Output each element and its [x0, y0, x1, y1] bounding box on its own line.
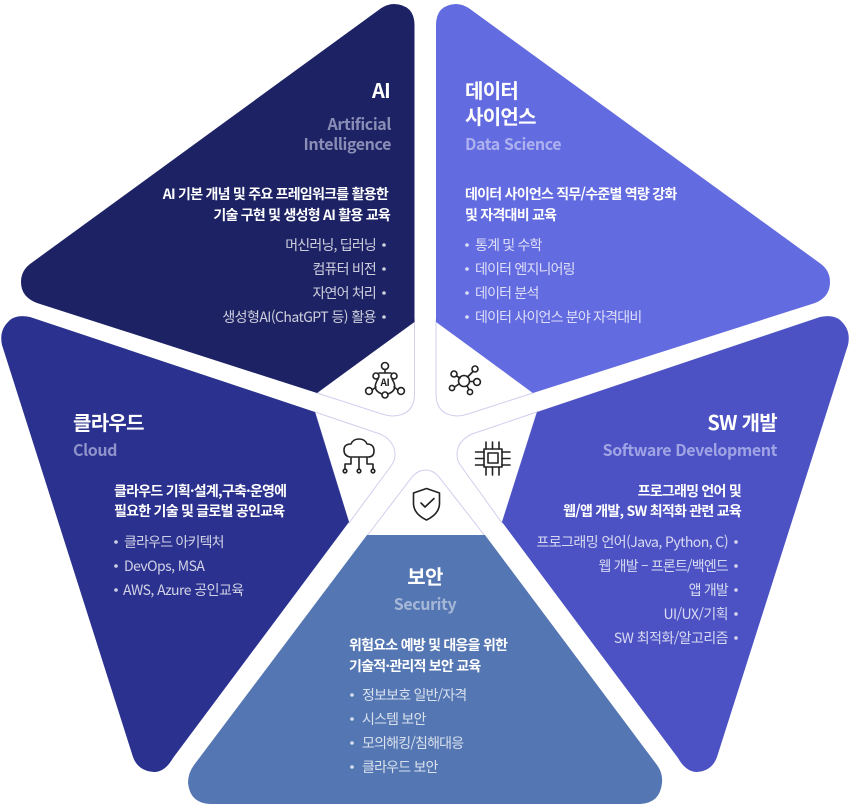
subtitle: Data Science: Data Science: [465, 131, 561, 155]
subtitle: Artificial Intelligence: Artificial: [328, 111, 391, 135]
description: Cloud: 필요한 기술 및 글로벌 공인교육: [114, 501, 285, 521]
panel: Data Science: [436, 4, 830, 416]
description: AI: AI 기본 개념 및 주요 프레임워크를 활용한: [163, 184, 388, 204]
description: SW Development: 프로그래밍 언어 및: [638, 481, 741, 501]
icon: AI network: [366, 362, 404, 398]
list: Data Science topics: 통계 및 수학: [475, 235, 543, 255]
heading: Cloud: 클라우드: [73, 407, 144, 436]
description: SW Development: 웹/앱 개발, SW 최적화 관련 교육: [563, 501, 742, 521]
list: Security topics: 정보보호 일반/자격: [362, 685, 466, 705]
icon: data network: [449, 366, 480, 395]
list: AI topics: 자연어 처리: [312, 283, 376, 303]
icon: chip: [476, 442, 510, 475]
description: Security: 위험요소 예방 및 대응을 위한: [349, 635, 507, 655]
list: Security topics: 모의해킹/침해대응: [362, 733, 464, 753]
description: Security: 기술적·관리적 보안 교육: [349, 656, 481, 676]
subtitle: Security: Security: [394, 591, 456, 615]
subtitle: Cloud: Cloud: [73, 437, 117, 461]
list: Data Science topics: 데이터 사이언스 분야 자격대비: [475, 307, 641, 327]
description: Cloud: 클라우드 기획·설계,구축·운영에: [114, 481, 286, 501]
list: Security topics: 클라우드 보안: [362, 757, 439, 777]
icon: shield: [414, 488, 440, 520]
list: Cloud topics: AWS, Azure 공인교육: [123, 580, 244, 600]
list: AI topics: 머신러닝, 딥러닝: [285, 235, 376, 255]
list: Data Science topics: 데이터 분석: [475, 283, 539, 303]
list: Cloud topics: [114, 532, 244, 600]
panel: Security: [188, 470, 662, 804]
list: Data Science topics: 데이터 엔지니어링: [475, 259, 575, 279]
list: Data Science topics: [465, 235, 641, 327]
list: SW topics: UI/UX/기획: [663, 604, 728, 624]
list: AI topics: 컴퓨터 비전: [312, 259, 376, 279]
list: Security topics: [350, 685, 466, 777]
icon: AI network: AI: [380, 374, 390, 389]
icon: cloud: [343, 439, 375, 473]
heading: SW Development: SW 개발: [707, 407, 777, 436]
heading: Data Science: 데이터: [465, 75, 518, 104]
list: SW topics: [536, 532, 738, 648]
heading: Security: 보안: [407, 561, 443, 590]
list: Cloud topics: 클라우드 아키텍처: [124, 532, 224, 552]
list: SW topics: 웹 개발 – 프론트/백엔드: [598, 556, 729, 576]
list: AI topics: 생성형AI(ChatGPT 등) 활용: [222, 307, 377, 327]
list: Cloud topics: DevOps, MSA: [124, 556, 205, 576]
list: Security topics: 시스템 보안: [362, 709, 426, 729]
list: SW topics: 앱 개발: [689, 580, 729, 600]
subtitle: Artificial Intelligence: Intelligence: [304, 131, 391, 155]
heading: AI: AI: [371, 75, 390, 104]
list: SW topics: 프로그래밍 언어(Java, Python, C): [536, 532, 728, 552]
subtitle: Software Development: Software Development: [603, 437, 778, 461]
description: AI: 기술 구현 및 생성형 AI 활용 교육: [213, 205, 391, 225]
list: AI topics: [222, 235, 386, 327]
description: Data Science: 및 자격대비 교육: [465, 205, 557, 225]
panel: AI: [21, 4, 414, 416]
panel: Cloud: [1, 316, 395, 772]
heading: Data Science: 사이언스: [465, 101, 536, 130]
description: Data Science: 데이터 사이언스 직무/수준별 역량 강화: [465, 184, 676, 204]
panel: SW Development: [457, 316, 849, 772]
list: SW topics: SW 최적화/알고리즘: [614, 628, 729, 648]
